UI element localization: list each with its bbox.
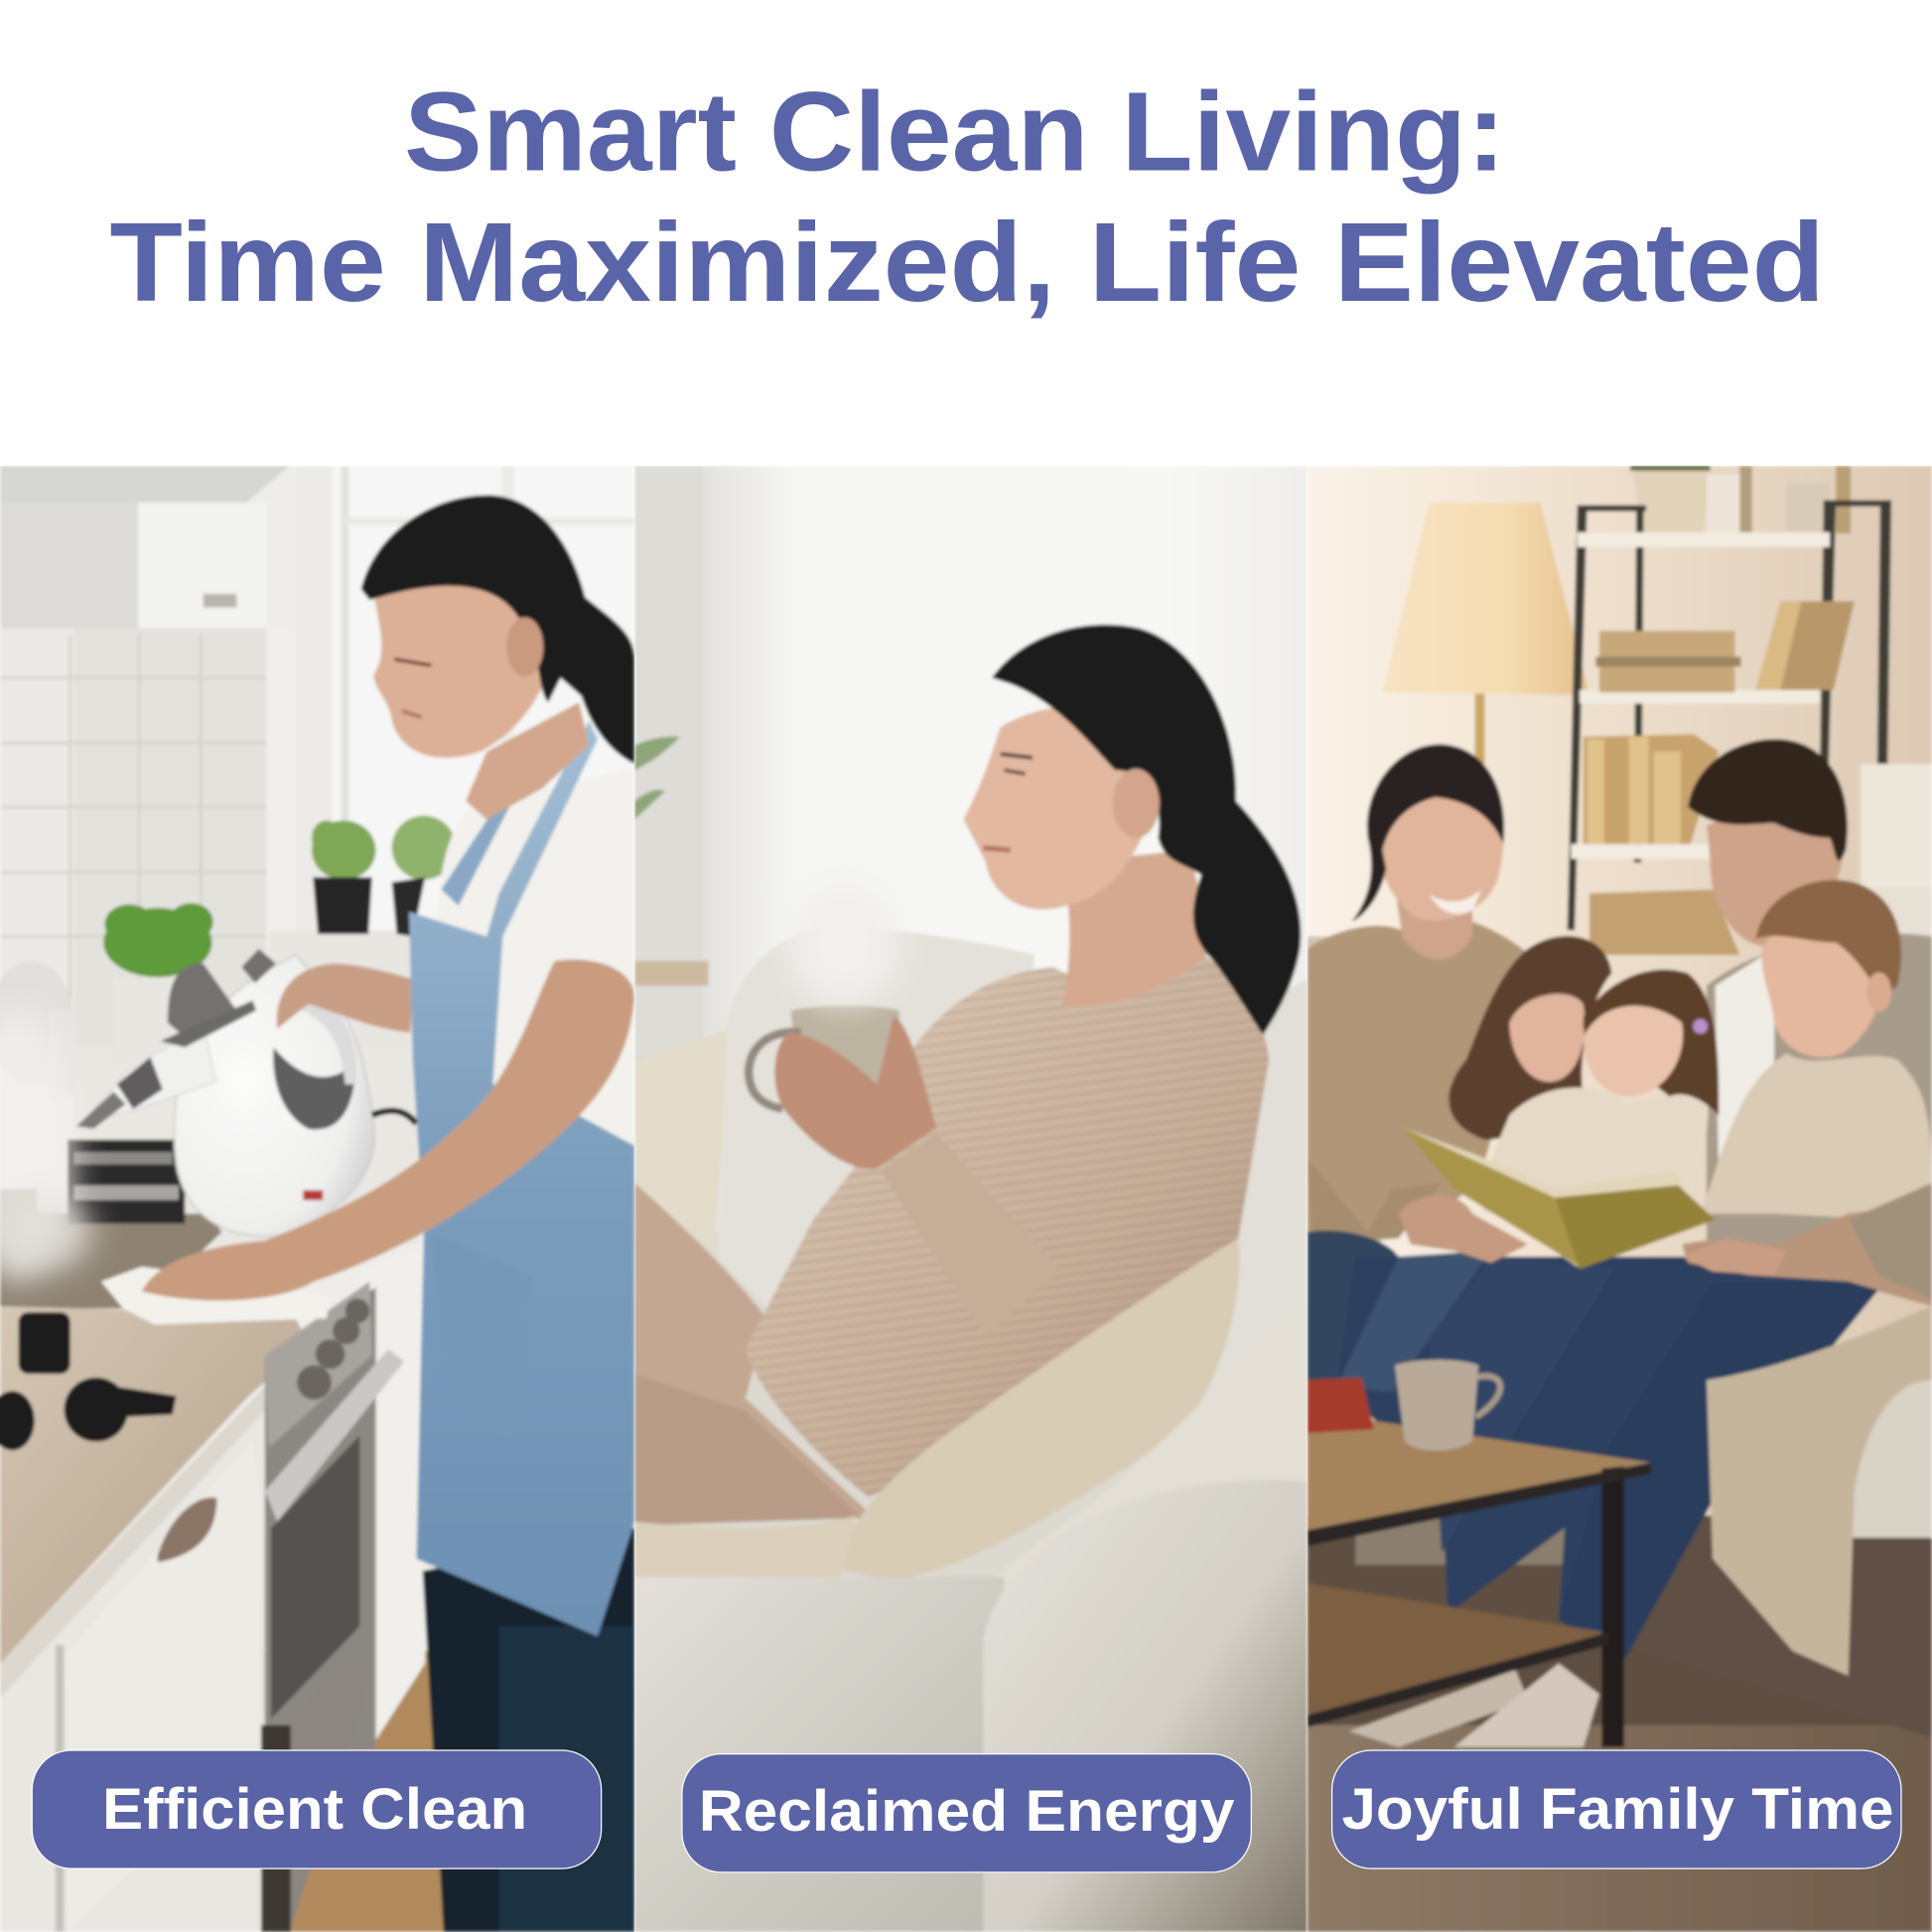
pillows [835, 1238, 1239, 1580]
book [1402, 1128, 1716, 1269]
father body [1707, 933, 1932, 1307]
icon: shelf decor [1630, 466, 1851, 533]
icon: steamer accessories [0, 1312, 176, 1450]
hair [361, 495, 634, 763]
socks [1349, 1670, 1528, 1747]
title: Time Maximized, Life Elevated [109, 200, 1825, 325]
father head [1707, 809, 1844, 947]
counter top [0, 1307, 308, 1663]
steam [786, 927, 901, 1021]
sofa base [699, 1233, 1148, 1579]
title [109, 69, 1825, 325]
knit pillow [637, 1031, 727, 1234]
label: reclaimed energy [682, 1754, 1251, 1872]
eye and lips [983, 755, 1033, 850]
mug [790, 1005, 901, 1085]
throw [634, 1516, 857, 1584]
icon: window plants [312, 816, 456, 936]
icon: counter plant [103, 903, 213, 1059]
back arm [277, 964, 414, 1033]
books [1584, 602, 1855, 955]
label: joyful family time: Joyful Family Time [1342, 1777, 1894, 1842]
base cabinets [44, 1413, 266, 1650]
legs [634, 1182, 873, 1525]
label: efficient clean: Efficient Clean [102, 1777, 527, 1842]
hair [992, 624, 1301, 1035]
legs [423, 1528, 634, 1932]
oven [265, 1288, 376, 1749]
sofa right back [1239, 981, 1307, 1232]
neck and face [466, 702, 589, 819]
hands [774, 1017, 936, 1169]
title: Smart Clean Living: [404, 69, 1506, 194]
steam [0, 1011, 73, 1282]
sofa back [719, 931, 1035, 1305]
floor and carpet [1308, 1516, 1932, 1932]
arms and hands [1682, 1201, 1932, 1307]
label: joyful family time [1332, 1750, 1901, 1868]
girl two [1478, 1087, 1709, 1213]
mother [1308, 921, 1540, 1238]
mug on table [1395, 1360, 1478, 1450]
icon: handheld steam cleaner [76, 949, 416, 1236]
sofa arm [983, 1480, 1308, 1932]
apron [409, 721, 634, 1636]
t-shirt [439, 834, 458, 875]
girl one [1449, 936, 1611, 1140]
icon: floor lamp [1382, 502, 1589, 763]
panel: joyful family time photo [1308, 466, 1932, 1932]
label: reclaimed energy: Reclaimed Energy [699, 1779, 1235, 1844]
cooktop [0, 1213, 221, 1309]
icon: blurred plant [634, 737, 680, 819]
jeans [1308, 1230, 1885, 1657]
boy [1701, 1053, 1932, 1220]
rag [101, 1267, 331, 1324]
bookshelf frame [1568, 500, 1891, 936]
panel: reclaimed energy sofa photo [634, 466, 1308, 1932]
coffee table [1308, 1411, 1651, 1530]
eye and lips [394, 659, 431, 717]
red box [1308, 1378, 1374, 1433]
front arm [142, 959, 634, 1301]
label: efficient clean [32, 1750, 602, 1868]
seat [634, 1578, 1004, 1932]
neck and face [1062, 850, 1213, 1007]
panel: efficient clean kitchen photo [0, 466, 634, 1932]
sofa [1308, 936, 1381, 1503]
sweater [746, 955, 1269, 1497]
floor and right cabinet [288, 1650, 447, 1932]
blanket [1707, 1307, 1932, 1676]
